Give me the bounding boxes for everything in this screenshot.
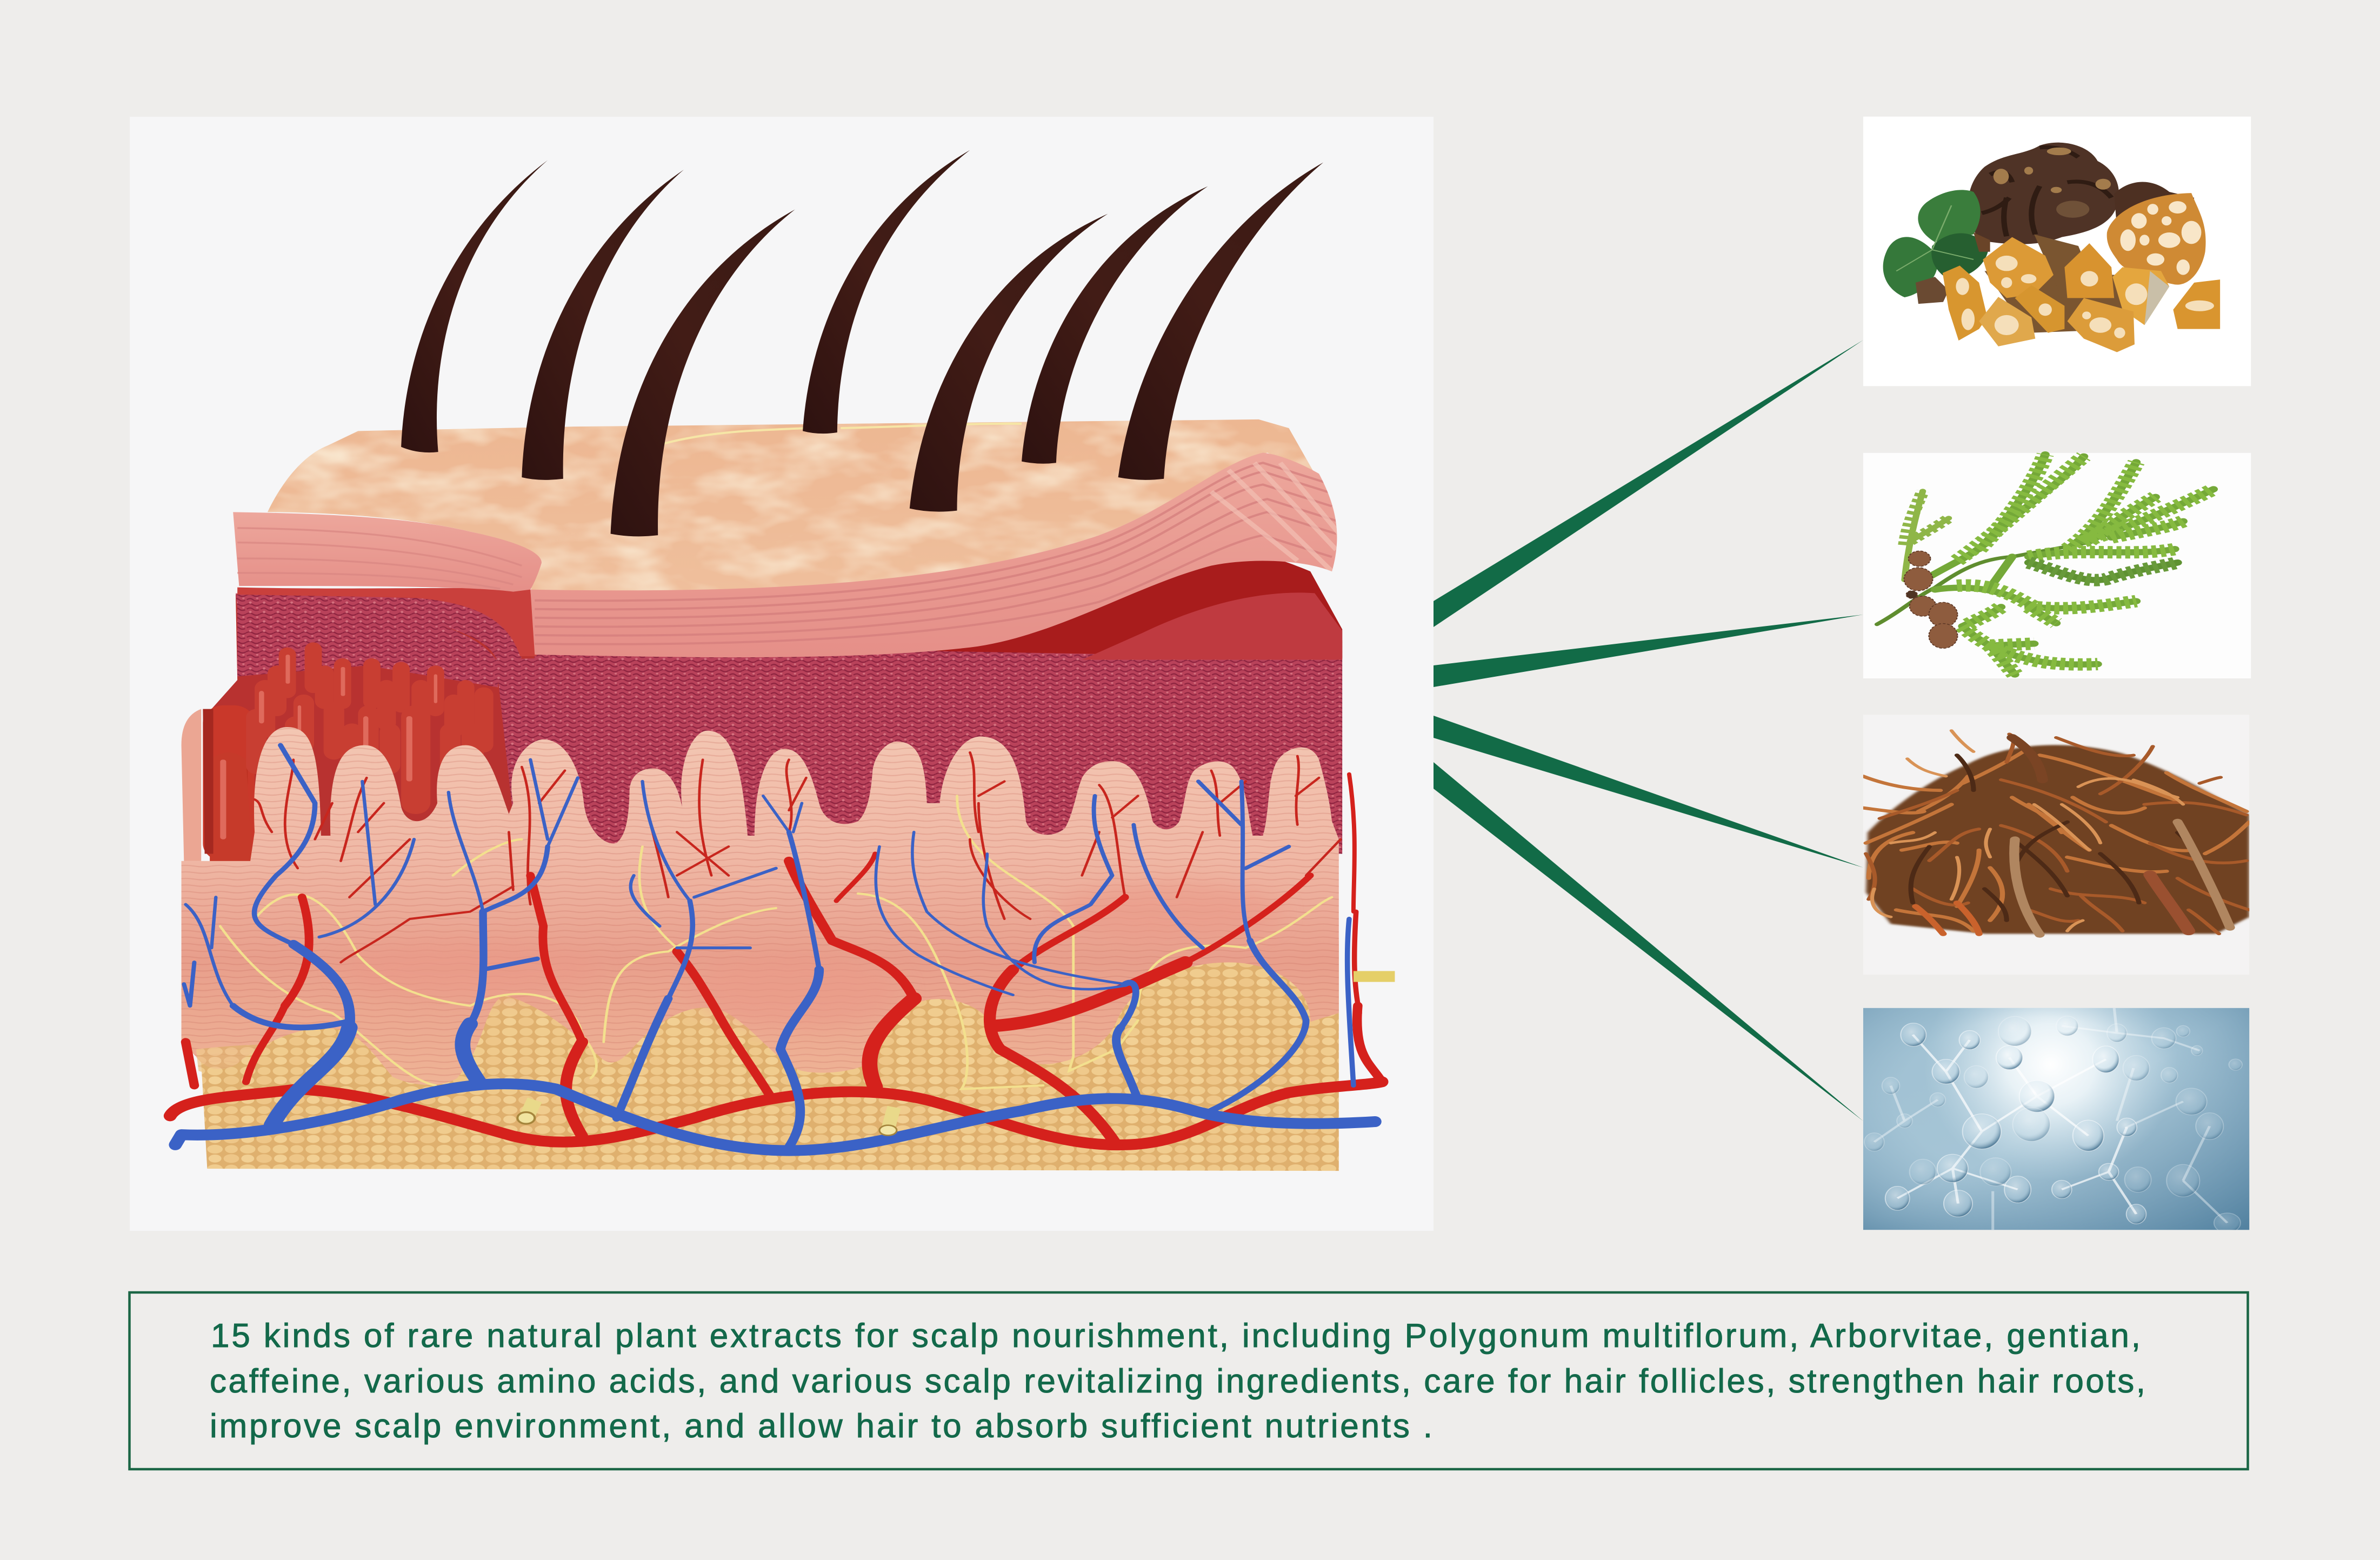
- green fronds, underlying stems: [1877, 455, 2214, 675]
- root pile mass: [1866, 745, 2249, 934]
- second tuber with cut face: [2107, 182, 2206, 285]
- pine cones: [1904, 551, 1957, 648]
- hairs: [401, 150, 1323, 536]
- green fronds, serrated leaflets: [1904, 455, 2214, 675]
- photo: gentian roots pile: [1863, 729, 2250, 938]
- arrow: ray to Polygonum multiflorum: [1434, 340, 1863, 627]
- thin red capillaries: [255, 752, 1341, 962]
- yellow nerves: [220, 796, 1332, 1089]
- photo: Polygonum multiflorum roots: [1863, 117, 2251, 386]
- arrow: ray to gentian: [1434, 716, 1863, 868]
- orange root slices: [1916, 232, 2220, 352]
- connector rays from illustration to ingredient photos: [1434, 340, 1863, 1121]
- skin surface: [268, 419, 1315, 592]
- photo: molecule structures: [1863, 1008, 2250, 1230]
- description text: caffeine, various amino acids, and various scalp revitalizing ingredients, care for hair follicles, strengthen hair roots,: [210, 1363, 2145, 1400]
- molecule bonds: [1874, 1008, 2227, 1230]
- description text box: [130, 1292, 2248, 1469]
- pink tissue with finger papillae: [182, 727, 1339, 1085]
- root strands: [1863, 731, 2249, 935]
- yellow nerve tubes: [517, 971, 1395, 1135]
- description text: 15 kinds of rare natural plant extracts for scalp nourishment, including Polygonum multiflorum, Arborvitae, gentian,: [211, 1317, 2141, 1355]
- red dermal papillae: [182, 642, 494, 865]
- description text: [210, 1317, 2145, 1445]
- thick blue vessels: [175, 745, 1375, 1151]
- central glow: [1938, 1008, 2163, 1169]
- thick pale stems: [2014, 822, 2230, 935]
- arrow: ray to Arborvitae: [1434, 615, 1863, 687]
- description text: improve scalp environment, and allow hair to absorb sufficient nutrients .: [210, 1408, 1432, 1445]
- dermis layer: [211, 550, 1342, 861]
- molecule spheres: [1864, 1016, 2242, 1232]
- green leaf: [1883, 190, 1989, 297]
- fat layer: [194, 941, 1339, 1171]
- panel: scalp cross-section illustration: [130, 117, 1434, 1231]
- epidermis band, folded: [233, 453, 1341, 657]
- photo: Arborvitae sprig: [1863, 453, 2251, 678]
- infographic canvas: [128, 117, 2251, 1470]
- arrow: ray to molecules: [1434, 762, 1863, 1121]
- fat showing at the foot of the tissue: [196, 1044, 392, 1082]
- thick red vessels: [170, 774, 1382, 1145]
- large brown tuber: [1968, 143, 2119, 244]
